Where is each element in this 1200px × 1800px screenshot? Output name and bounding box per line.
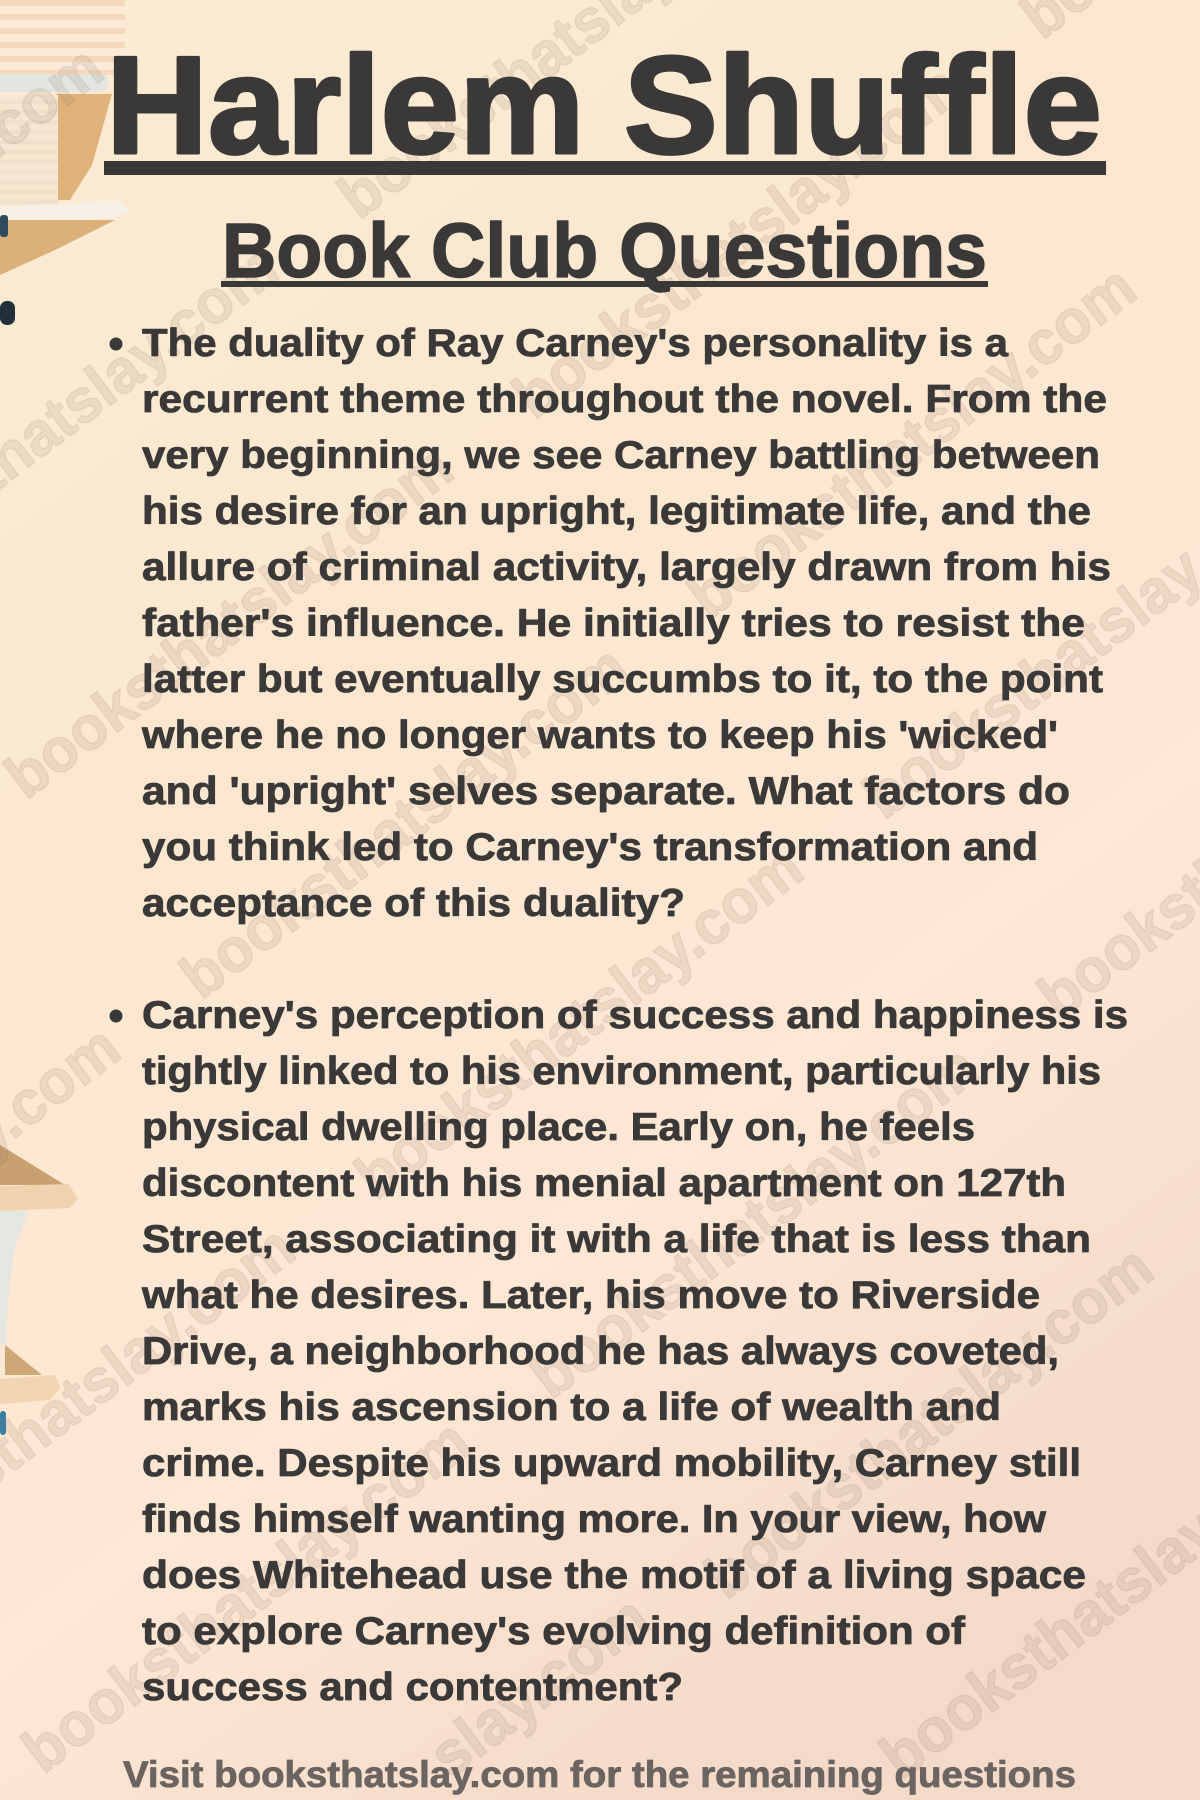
watermarks: booksthatslay.com: booksthatslay.com xyxy=(343,832,816,1212)
watermarks: booksthatslay.com: booksthatslay.com xyxy=(518,1032,991,1412)
question 1: his desire for an upright, legitimate life, and the xyxy=(142,490,1091,533)
question 2: physical dwelling place. Early on, he feels xyxy=(142,1106,975,1149)
question 1: very beginning, we see Carney battling between xyxy=(142,434,1100,477)
watermarks: booksthatslay.com: booksthatslay.com xyxy=(501,52,974,432)
watermarks: booksthatslay.com: booksthatslay.com xyxy=(676,252,1149,632)
question 1: where he no longer wants to keep his 'wicked' xyxy=(141,714,1058,757)
question 2: what he desires. Later, his move to Riverside xyxy=(141,1274,1040,1317)
question 2: finds himself wanting more. In your view, how xyxy=(142,1498,1047,1541)
question 2 xyxy=(110,994,1128,1709)
question 1: you think led to Carney's transformation and xyxy=(142,826,1038,869)
question 1: The duality of Ray Carney's personality is a xyxy=(142,322,1008,365)
question 2: tightly linked to his environment, particularly his xyxy=(142,1050,1101,1093)
question 1: and 'upright' selves separate. What factors do xyxy=(142,770,1070,813)
watermarks: booksthatslay.com: booksthatslay.com xyxy=(693,1232,1166,1612)
question 1 xyxy=(110,322,1111,925)
question 2: Street, associating it with a life that is less than xyxy=(142,1218,1091,1261)
question 1: latter but eventually succumbs to it, to the point xyxy=(142,658,1103,701)
question 2: success and contentment? xyxy=(142,1666,683,1709)
question 2: discontent with his menial apartment on 127th xyxy=(142,1162,1066,1205)
watermarks: booksthatslay.com: slay.com xyxy=(417,1583,662,1791)
illustration: upper book stack xyxy=(0,0,130,325)
question 1: recurrent theme throughout the novel. From the xyxy=(142,378,1107,421)
question 1: allure of criminal activity, largely drawn from his xyxy=(142,546,1111,589)
question 1: acceptance of this duality? xyxy=(142,882,685,925)
illustration: lower book stack xyxy=(0,1145,78,1435)
watermarks: booksthatslay.com: booksthatslay.com xyxy=(10,1406,483,1786)
watermarks: booksthatslay.com: booksthatslay.com xyxy=(168,632,641,1012)
title: Harlem Shuffle xyxy=(106,28,1102,183)
footer call to action: Visit booksthatslay.com for the remaining questions xyxy=(123,1754,1076,1795)
question 1: father's influence. He initially tries to resist the xyxy=(142,602,1085,645)
question 2: marks his ascension to a life of wealth and xyxy=(142,1386,1001,1429)
subtitle: Book Club Questions xyxy=(222,208,987,294)
question 2: to explore Carney's evolving definition of xyxy=(142,1610,966,1653)
question 2: crime. Despite his upward mobility, Carney still xyxy=(142,1442,1081,1485)
question 2: Carney's perception of success and happiness is xyxy=(142,994,1128,1037)
question 2: Drive, a neighborhood he has always coveted, xyxy=(142,1330,1059,1373)
question 2: does Whitehead use the motif of a living space xyxy=(142,1554,1086,1597)
watermarks: booksthatslay.com: booksthatslay.com xyxy=(0,432,466,812)
